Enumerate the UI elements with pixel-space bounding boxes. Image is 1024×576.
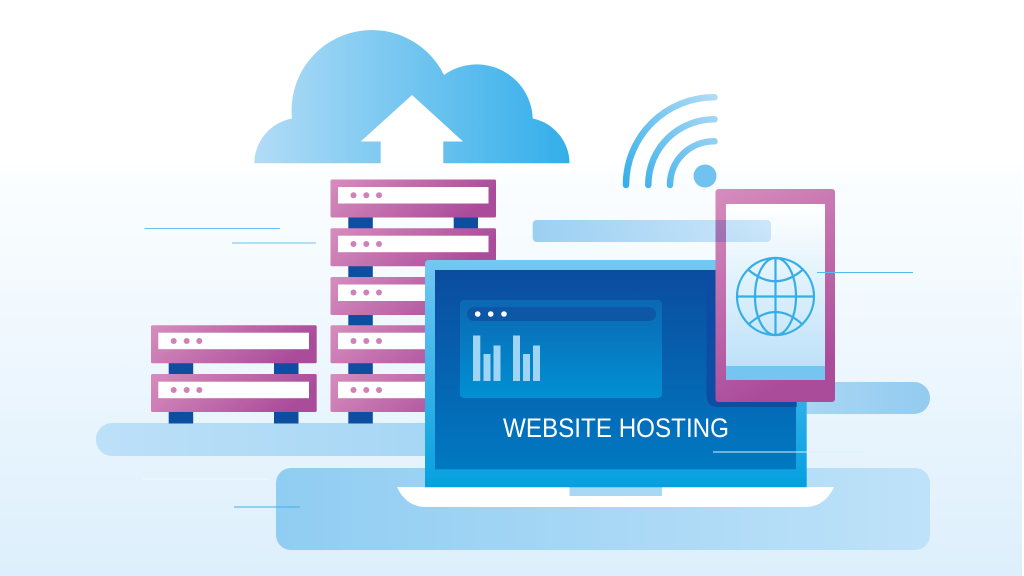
laptop — [397, 260, 864, 507]
server stack: left — [151, 325, 317, 424]
laptop screen — [435, 270, 796, 469]
server unit 5 — [330, 374, 496, 412]
laptop base — [397, 487, 834, 507]
icon: globe — [737, 258, 814, 335]
pointer line — [713, 452, 864, 453]
server unit top — [151, 325, 317, 363]
floating panel: bottom — [276, 468, 930, 550]
server stack: right — [330, 180, 496, 424]
floating bar: right — [740, 382, 930, 414]
browser dots — [475, 311, 507, 317]
title text: WEBSITE HOSTING — [503, 413, 729, 443]
laptop lid — [425, 260, 807, 487]
phone — [716, 189, 835, 402]
address bar — [533, 220, 771, 242]
server unit 4 — [330, 325, 496, 363]
background — [0, 165, 1022, 576]
browser window panel — [460, 300, 662, 398]
icon: wifi signal — [626, 97, 716, 188]
phone pointer line — [817, 272, 913, 273]
motion lines — [143, 228, 316, 508]
server unit 1 — [330, 180, 496, 218]
server unit bottom — [151, 374, 317, 412]
laptop notch — [570, 487, 662, 496]
server unit 3 — [330, 277, 496, 315]
bar chart — [473, 336, 540, 381]
browser title bar — [467, 307, 656, 321]
phone screen band — [726, 366, 825, 380]
server unit 2 — [330, 228, 496, 266]
icon: cloud with upload arrow — [254, 30, 570, 163]
floating bar: left — [96, 423, 446, 456]
phone shadow — [706, 270, 797, 407]
phone screen — [726, 204, 825, 380]
